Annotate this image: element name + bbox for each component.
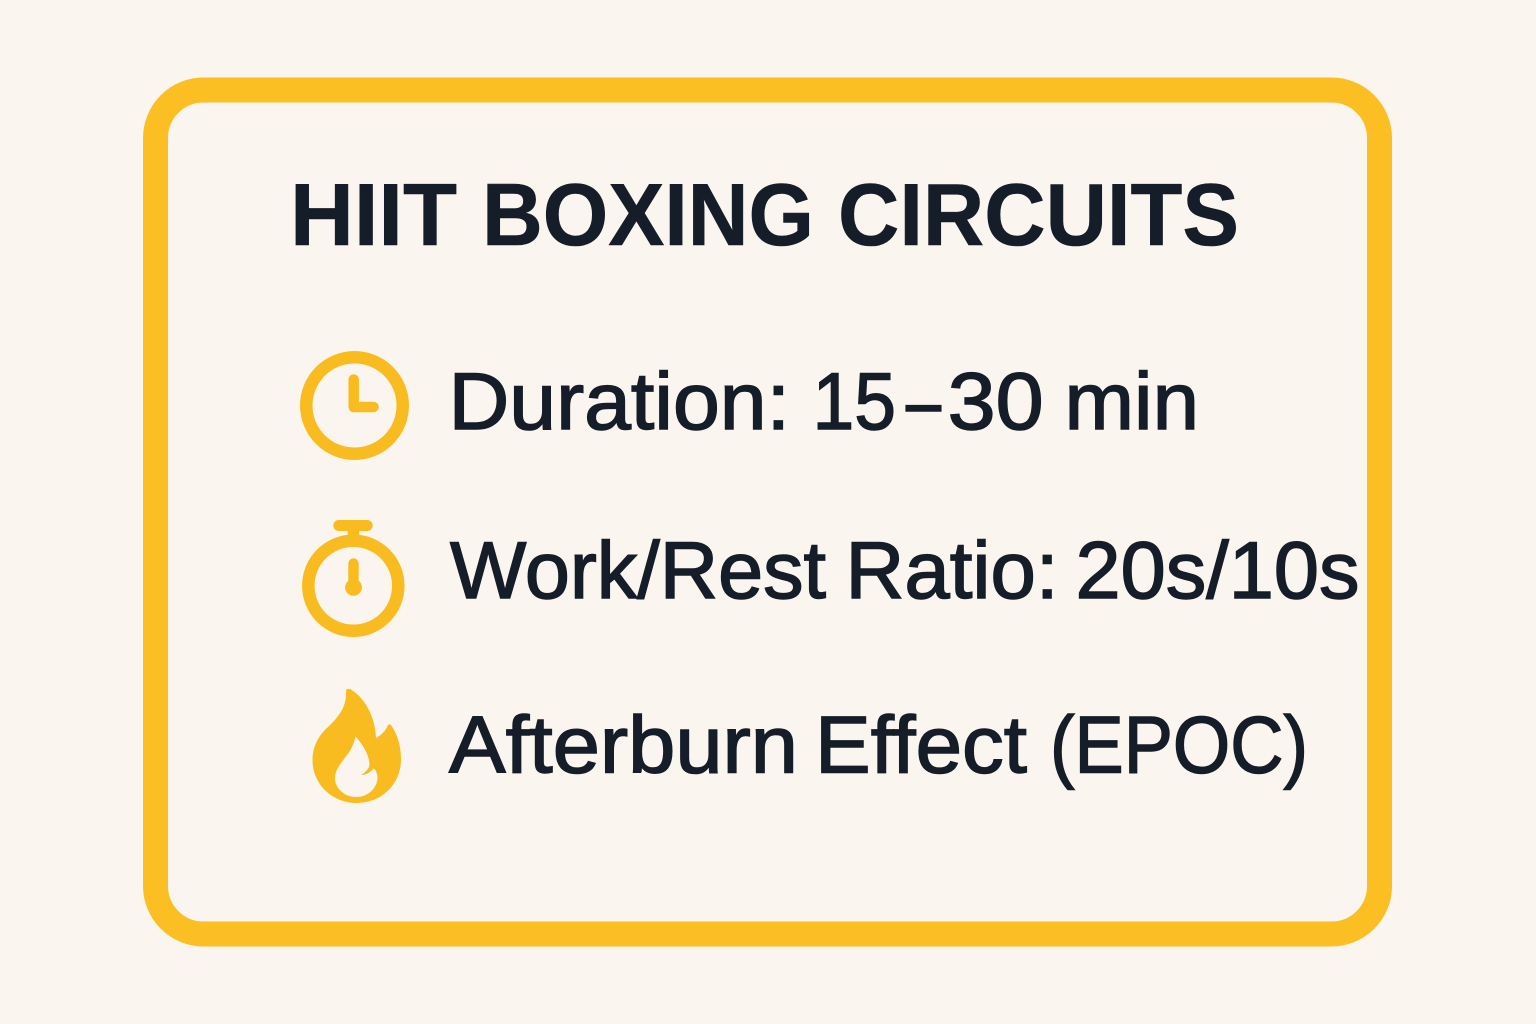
text: work/rest ratio: 20s/10s [1076,526,1360,616]
text: duration [448,357,1199,447]
icon: clock [306,357,403,454]
text: afterburn effect: (EPOC) [1050,700,1308,790]
text: afterburn effect [449,700,1308,790]
text: duration: 30 [948,357,1044,447]
title: CIRCUITS [838,165,1239,264]
title: BOXING [482,165,814,264]
text: duration: 15 [812,357,896,447]
icon: stopwatch [308,520,398,631]
icon: flame [312,689,401,803]
text: duration: min [1064,357,1199,447]
title: HIIT [290,165,457,264]
title [290,165,1239,264]
text: afterburn effect: Afterburn [449,700,798,790]
text: work/rest ratio: Work/Rest [450,526,826,616]
text: afterburn effect: Effect [815,700,1027,790]
text: duration: Duration: [448,357,790,447]
card frame [156,90,1380,934]
text: work/rest ratio: Ratio: [846,526,1058,616]
text: work/rest ratio [450,526,1360,616]
text: duration: – [906,357,942,447]
